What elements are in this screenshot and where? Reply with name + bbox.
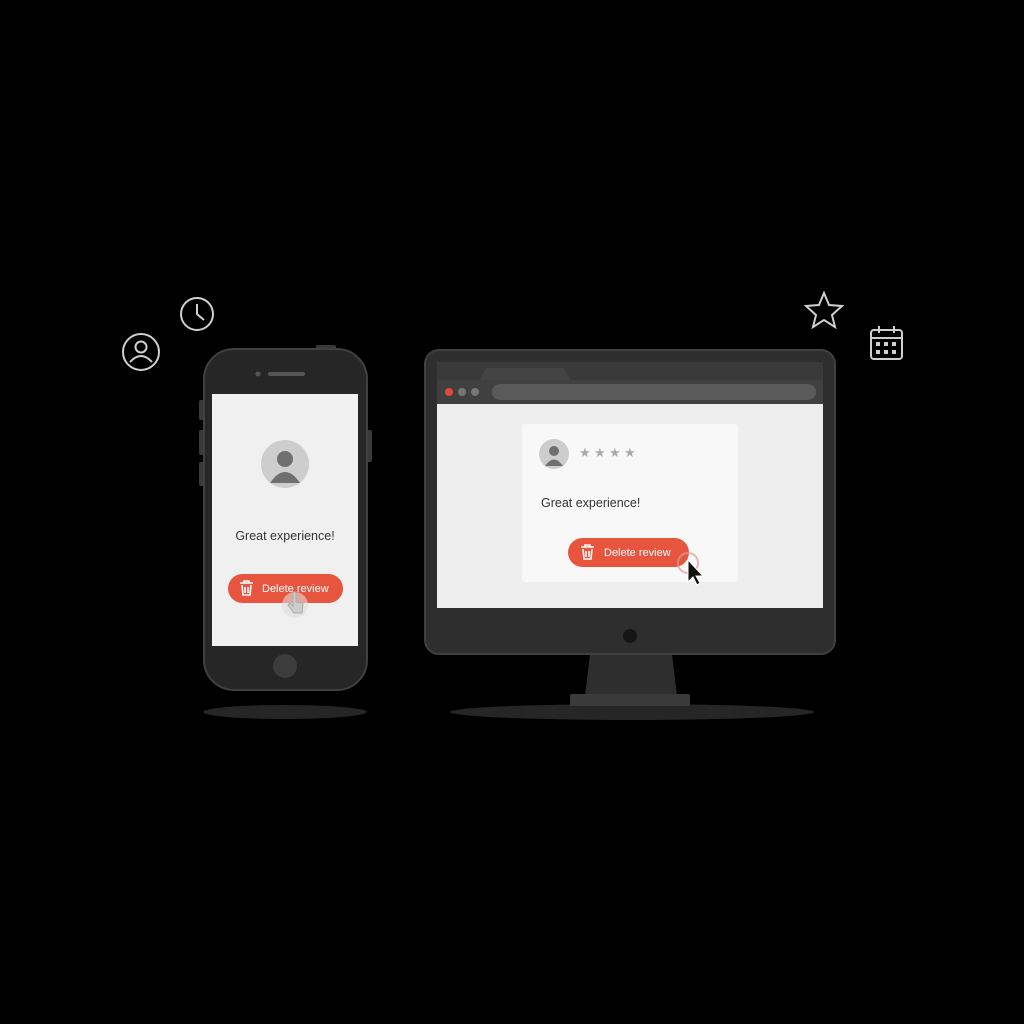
phone shadow xyxy=(203,705,367,719)
icon: star xyxy=(806,293,842,327)
icon: clock xyxy=(181,298,213,330)
icon: calendar xyxy=(871,326,902,359)
browser bar xyxy=(437,362,823,404)
stars: ★ xyxy=(579,445,591,460)
stars: ★ xyxy=(609,445,621,460)
phone avatar xyxy=(261,440,309,488)
card delete button: Delete review xyxy=(604,547,671,559)
stars: ★ xyxy=(624,445,636,460)
icon: user xyxy=(123,334,159,370)
monitor shadow xyxy=(450,704,814,720)
phone delete button: Delete review xyxy=(262,583,329,595)
review card xyxy=(522,424,738,585)
stars xyxy=(579,445,636,460)
card avatar xyxy=(539,439,569,469)
stars: ★ xyxy=(594,445,606,460)
cursor xyxy=(688,560,703,585)
monitor xyxy=(425,350,835,706)
phone screen xyxy=(212,394,358,646)
card delete button xyxy=(568,538,698,573)
phone review text: Great experience! xyxy=(235,529,335,543)
phone delete button xyxy=(228,574,343,618)
card review text: Great experience! xyxy=(541,496,640,510)
phone xyxy=(199,345,372,690)
